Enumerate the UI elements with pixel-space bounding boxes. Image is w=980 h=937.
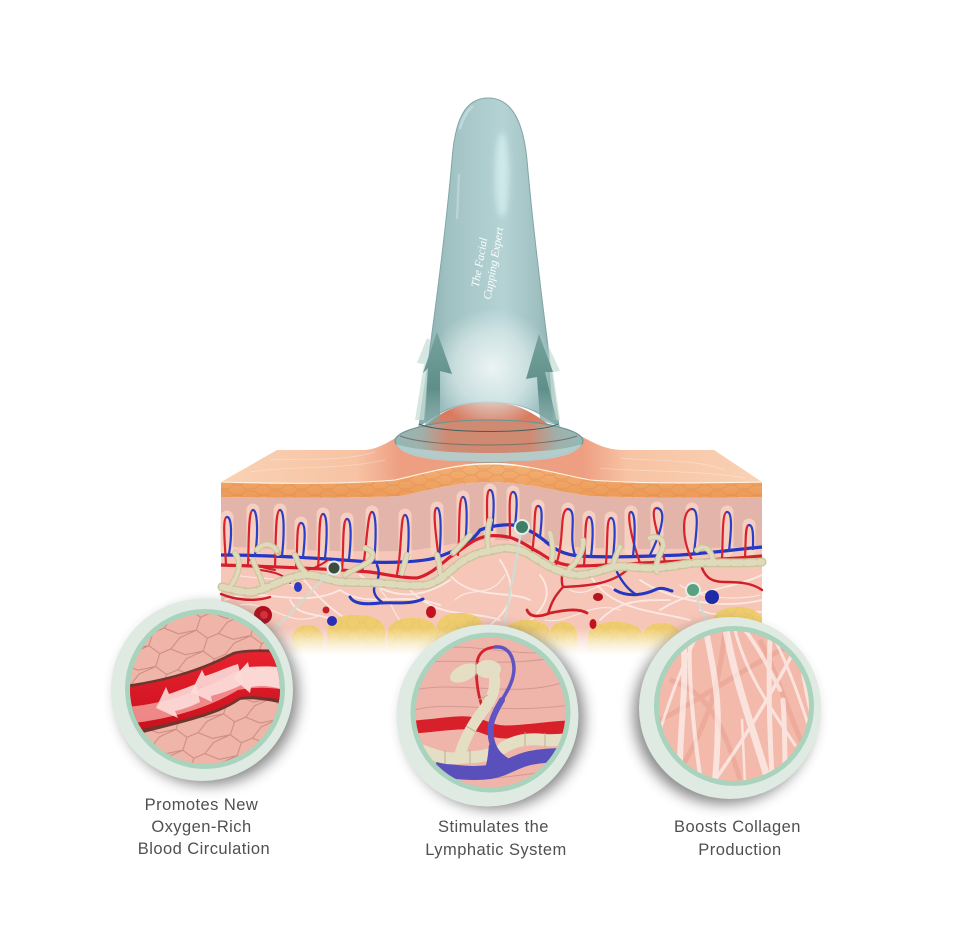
- circle frame: [396, 624, 578, 806]
- cup brand text: [470, 226, 506, 301]
- magnified lymph view: [416, 638, 566, 788]
- caption: collagen: Production: [698, 841, 782, 859]
- flow arrow 2: [191, 664, 243, 702]
- circle shadow: [634, 624, 814, 804]
- lymph riser: [445, 659, 545, 764]
- lower dermis: [221, 510, 762, 660]
- capillary loops: blue limbs: [227, 490, 753, 562]
- circle panel: lymphatic system: [396, 624, 584, 809]
- left upward arrow: [415, 332, 452, 426]
- small cross-section vessels: [254, 582, 719, 629]
- circle panel: blood circulation: [111, 599, 298, 785]
- vein: [435, 755, 565, 773]
- skin cross-section block: [215, 432, 770, 695]
- circle panel: collagen: [634, 617, 821, 804]
- caption: blood circulation: Oxygen-Rich: [151, 818, 252, 836]
- caption: lymphatic system: Lymphatic System: [425, 841, 567, 859]
- magnified collagen fibres: [659, 631, 809, 781]
- circle shadow: [404, 629, 584, 809]
- callout connector: circulation: [272, 562, 340, 632]
- collagen fibres in dermis: [225, 560, 762, 630]
- flow stream: [125, 667, 285, 724]
- circle frame: [111, 599, 293, 781]
- papillary dermis: [221, 482, 762, 551]
- magnified artery view: [130, 614, 280, 764]
- main red artery: [221, 536, 762, 578]
- circle shadow: [118, 605, 298, 785]
- fine red capillary: [476, 647, 495, 706]
- cup brand text: The Facial: [470, 237, 490, 288]
- dermal papillae halos: [227, 490, 749, 556]
- fat lobes: [292, 607, 762, 665]
- facial cup: [395, 98, 583, 462]
- right upward arrow: [526, 334, 560, 426]
- callout connector: lymphatic: [504, 520, 529, 626]
- bottom fade to white: [215, 628, 770, 695]
- cup highlights: [457, 107, 509, 218]
- caption: blood circulation: Promotes New: [145, 796, 258, 814]
- caption: blood circulation: Blood Circulation: [138, 840, 270, 858]
- blue branches: [350, 565, 672, 604]
- caption: collagen: Boosts Collagen: [674, 818, 801, 836]
- purple riser: [491, 647, 514, 760]
- caption: lymphatic system: Stimulates the: [438, 818, 549, 836]
- cup flange: [395, 420, 583, 462]
- artery: [415, 723, 568, 732]
- skin surface texture: [250, 452, 745, 478]
- skin top surface: [221, 432, 762, 486]
- red branches: [221, 560, 762, 616]
- skin bulge drawn inside cup: [416, 402, 560, 445]
- cup lower glow: [430, 308, 554, 428]
- lymph vessel lower: [420, 739, 570, 758]
- callout connector: collagen: [686, 583, 706, 620]
- lymphatic vessels: [222, 520, 762, 592]
- capillary loops: red limbs: [224, 490, 749, 574]
- cup brand text: Cupping Expert: [482, 226, 506, 301]
- vein junction: [486, 744, 508, 766]
- main blue vein: [221, 525, 762, 562]
- circle frame: [639, 617, 821, 799]
- flow arrow 3: [156, 684, 200, 718]
- cup body: [419, 98, 559, 426]
- flow arrow 1: [240, 662, 280, 693]
- epidermis orange band: [221, 464, 762, 498]
